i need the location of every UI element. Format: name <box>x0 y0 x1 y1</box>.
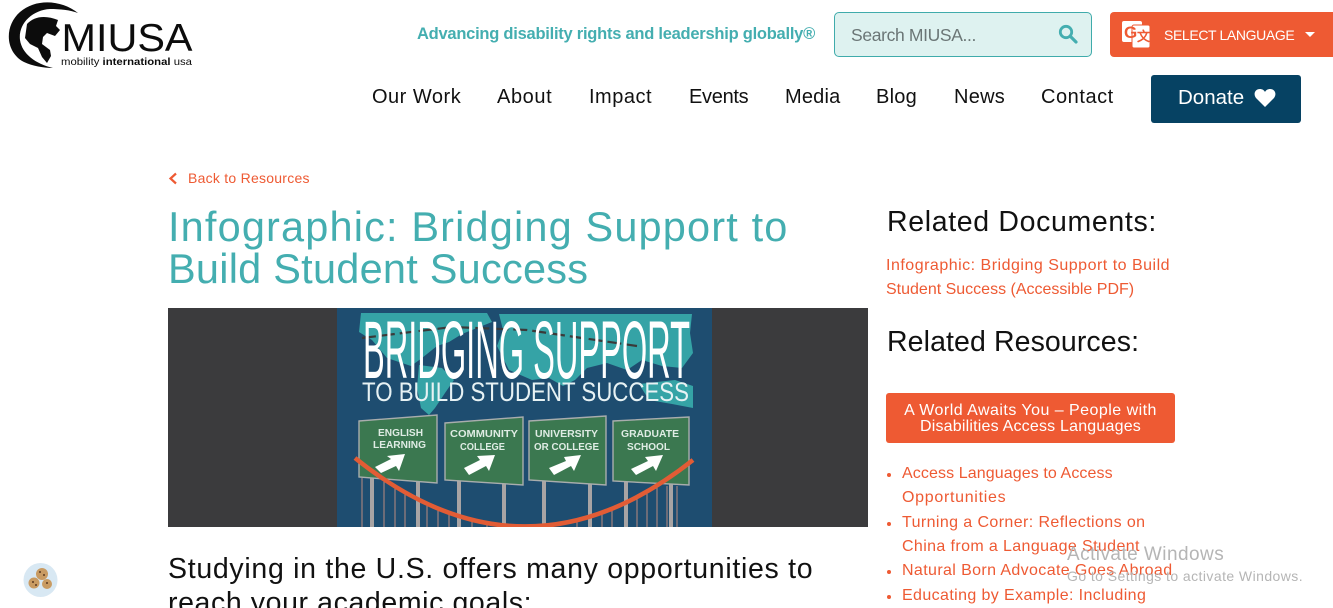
resource button <box>886 393 1175 443</box>
icon: caret <box>1305 32 1315 37</box>
donate button <box>1151 75 1301 123</box>
sign: Graduate School <box>613 417 689 485</box>
sign: Community College <box>445 417 523 485</box>
sign: English Learning: ENGLISH <box>378 427 423 439</box>
bridge suspenders <box>362 478 677 527</box>
navigation: News <box>954 86 1005 108</box>
sign: Graduate School: GRADUATE <box>621 428 679 440</box>
resource list: Turning a Corner: Reflections on <box>902 514 1145 531</box>
resource button: Disabilities Access Languages <box>920 418 1141 435</box>
language label: SELECT LANGUAGE <box>1164 27 1294 43</box>
dashed route <box>362 327 637 346</box>
icon: globe with crescent <box>9 2 78 68</box>
donate label: Donate <box>1178 86 1244 109</box>
watermark: Go to Settings to activate Windows. <box>1067 568 1303 584</box>
sign: English Learning <box>359 415 437 483</box>
hero image band <box>168 308 868 527</box>
intro paragraph: Studying in the U.S. offers many opportunities to <box>168 553 813 585</box>
cookie badge <box>24 563 58 597</box>
icon: chevron left <box>169 172 177 184</box>
related documents link <box>886 257 1170 298</box>
related documents link: Student Success (Accessible PDF) <box>886 281 1134 298</box>
resource button: A World Awaits You – People with <box>904 402 1157 419</box>
navigation <box>372 86 1114 108</box>
sign: University or College: UNIVERSITY <box>535 428 598 440</box>
sign: Graduate School: SCHOOL <box>627 441 671 453</box>
related documents link: Infographic: Bridging Support to Build <box>886 257 1170 274</box>
back link text: Back to Resources <box>188 170 310 186</box>
related documents heading: Related Documents: <box>887 206 1157 238</box>
navigation: Events <box>689 86 748 108</box>
resource list: Educating by Example: Including <box>902 587 1146 604</box>
intro paragraph <box>168 553 813 608</box>
icon: heart <box>1254 89 1276 107</box>
infographic thumbnail <box>337 308 712 527</box>
page title <box>168 203 788 292</box>
navigation: Contact <box>1041 86 1114 108</box>
sign: Community College: COMMUNITY <box>450 428 518 440</box>
icon: translate <box>1122 21 1151 48</box>
icon: translate: G <box>1124 23 1137 42</box>
navigation: Our Work <box>372 86 461 108</box>
sign: University or College <box>529 416 606 485</box>
page title: Infographic: Bridging Support to <box>168 203 788 250</box>
logo: MIUSA <box>8 2 192 68</box>
icon: search <box>1058 24 1078 44</box>
sign: University or College: OR COLLEGE <box>534 441 599 453</box>
sign: Community College: COLLEGE <box>460 441 505 453</box>
sign: English Learning: LEARNING <box>373 439 426 451</box>
navigation: About <box>497 86 552 108</box>
bridge cable <box>355 458 693 527</box>
resource list: Opportunities <box>902 489 1006 506</box>
resource list <box>887 465 1172 604</box>
navigation: Impact <box>589 86 652 108</box>
navigation: Media <box>785 86 840 108</box>
page title: Build Student Success <box>168 245 588 292</box>
related resources heading: Related Resources: <box>887 326 1139 358</box>
resource list: Natural Born Advocate Goes Abroad <box>902 562 1172 579</box>
world map <box>359 313 693 415</box>
logo tagline: mobility international usa <box>61 56 192 68</box>
navigation: Blog <box>876 86 917 108</box>
language button <box>1110 12 1333 57</box>
logo wordmark: MIUSA <box>62 17 192 60</box>
search placeholder: Search MIUSA... <box>851 25 976 45</box>
back link <box>169 170 310 186</box>
watermark: Activate Windows <box>1067 544 1224 565</box>
search box <box>834 12 1092 57</box>
resource list: China from a Language Student <box>902 538 1140 555</box>
watermark <box>1067 544 1303 584</box>
sign posts <box>370 478 673 527</box>
icon: translate: 文 <box>1137 29 1151 44</box>
resource list: Access Languages to Access <box>902 465 1113 482</box>
tagline: Advancing disability rights and leadership globally® <box>417 25 815 43</box>
